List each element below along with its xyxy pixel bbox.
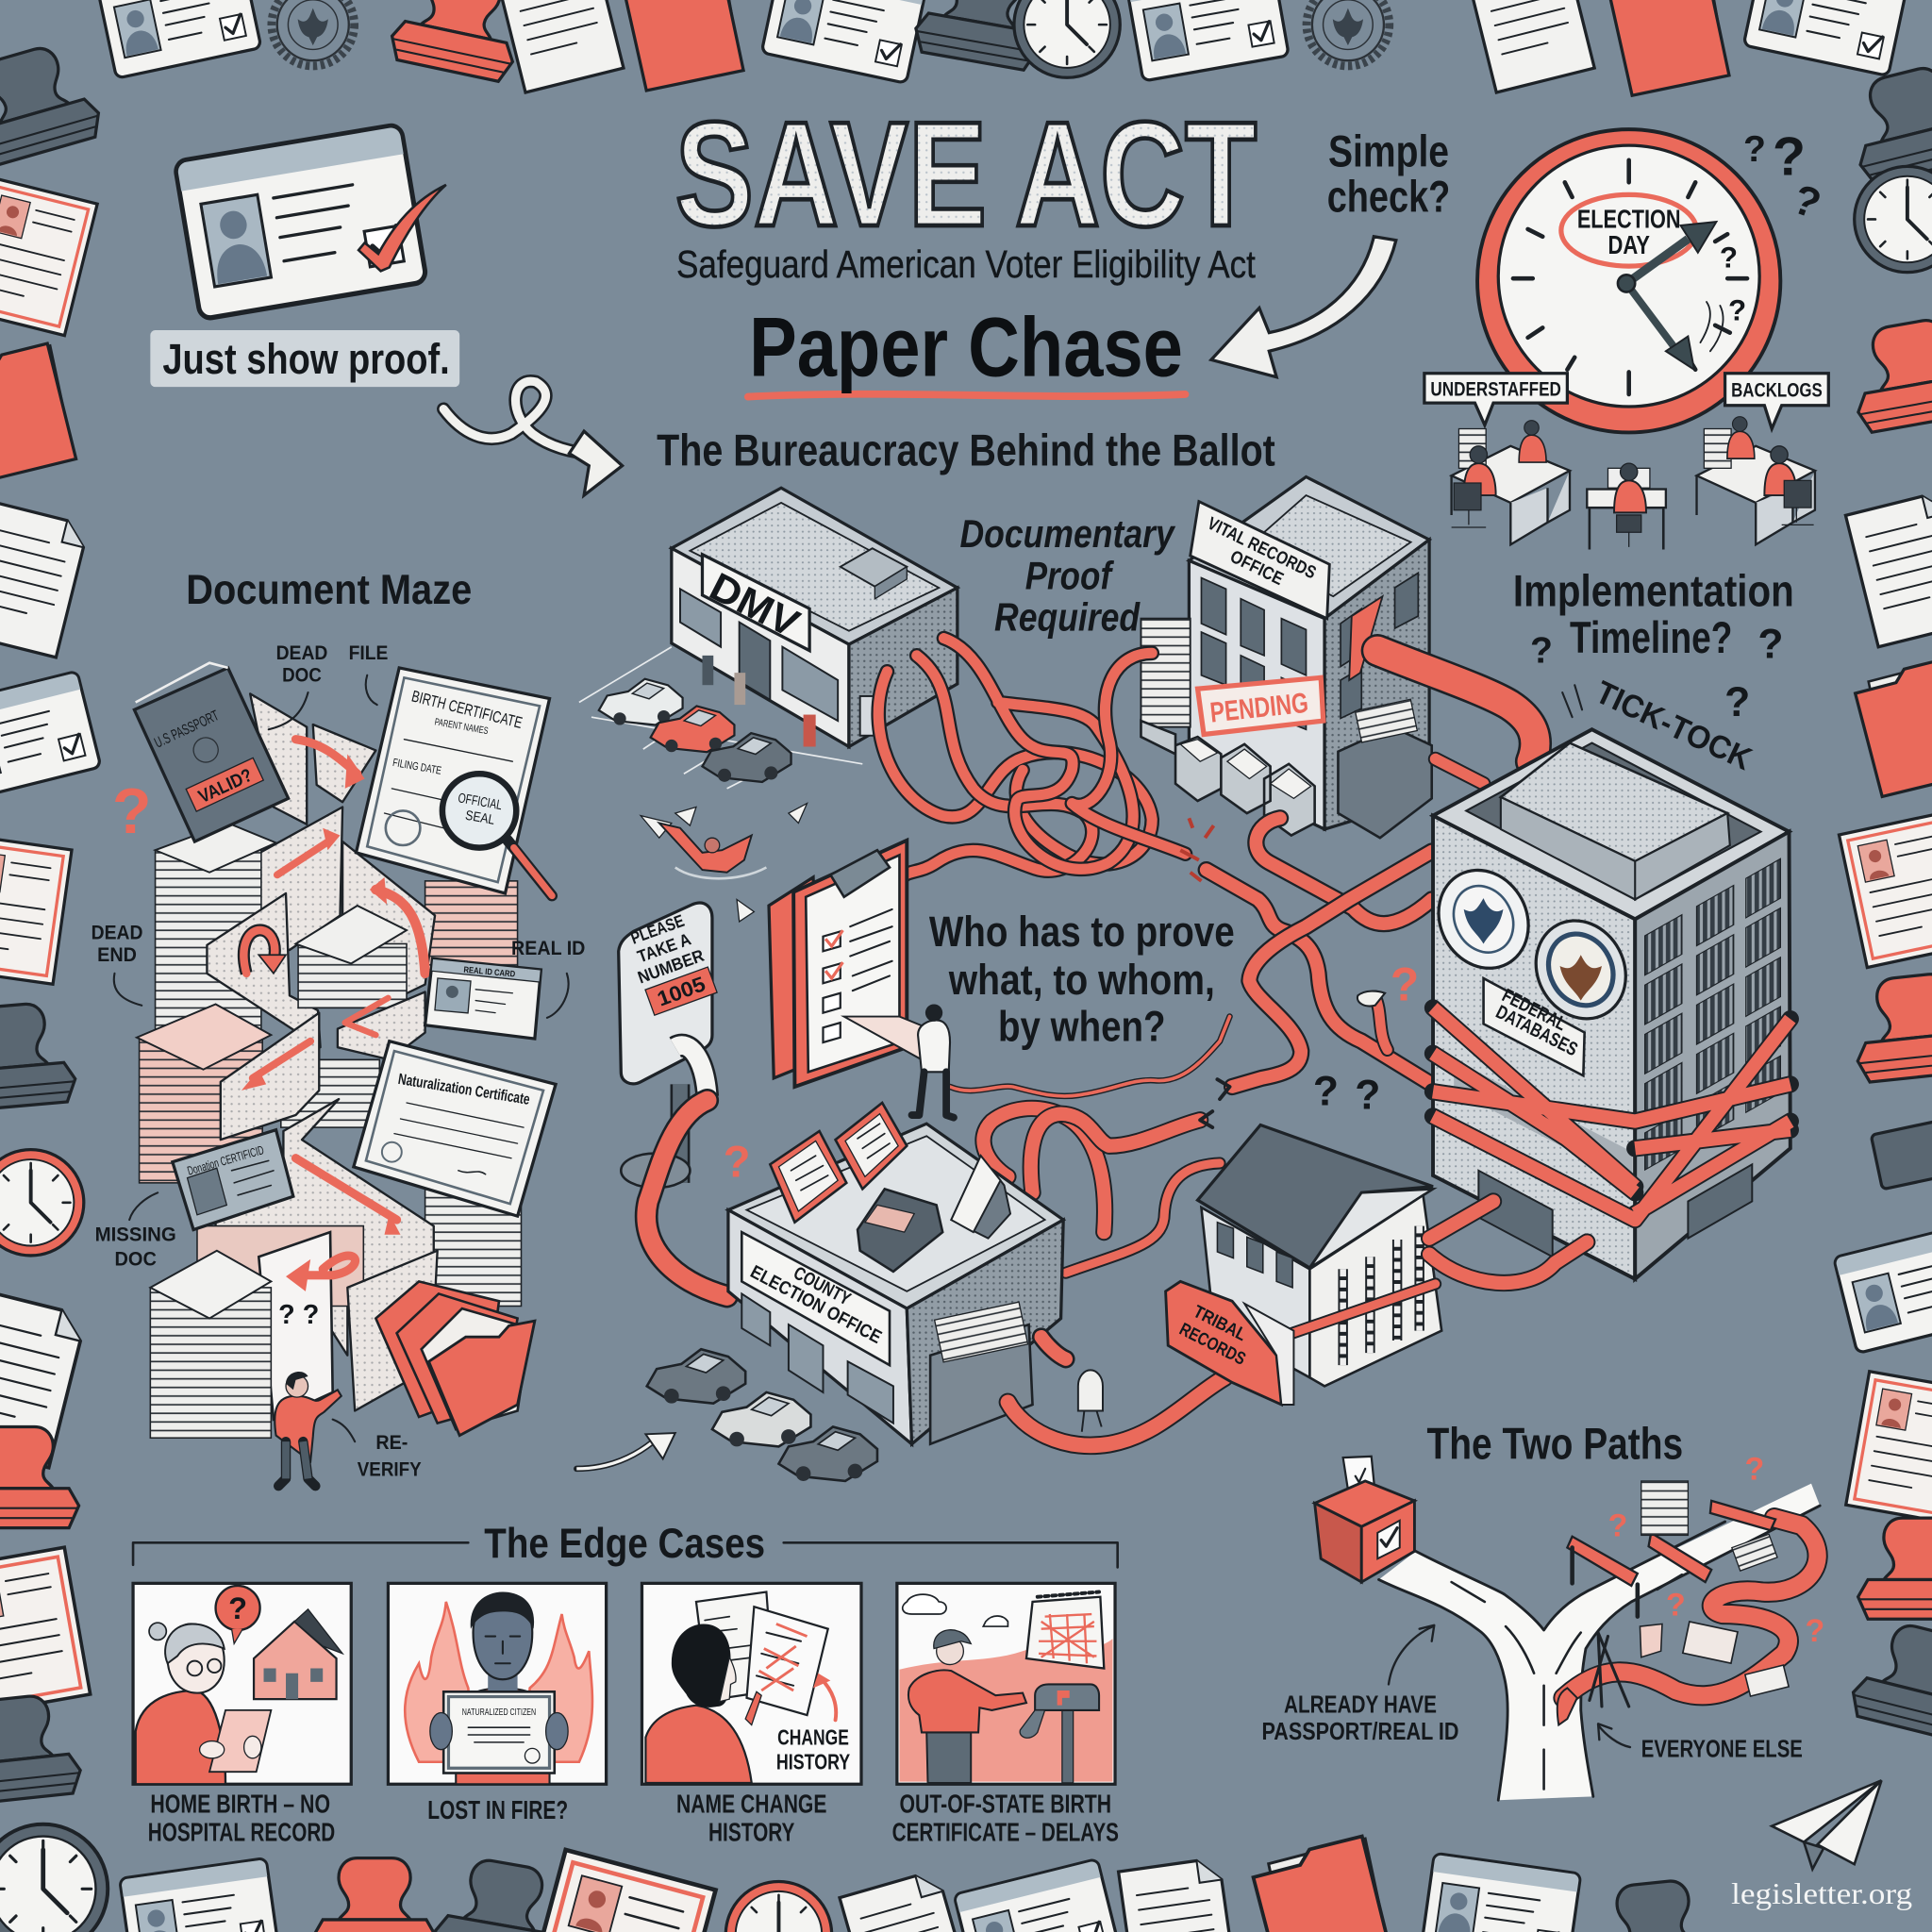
red question marks: ? [1745, 1452, 1764, 1488]
label: question marks near pipes: ? [724, 1136, 750, 1186]
certificate: naturalization [354, 1041, 556, 1216]
building: Tribal Records courthouse: TRIBAL [1190, 1302, 1249, 1345]
arrow: curly to tagline [443, 381, 623, 495]
label: Implementation Timeline: ? [1724, 679, 1750, 725]
building: County Election Office [576, 1103, 1103, 1481]
subtitle: Safeguard American Voter Eligibility Act [676, 242, 1256, 286]
case: lost in fire: NATURALIZED CITIZEN [462, 1707, 536, 1718]
tangled red tape knot [878, 639, 1214, 881]
building: Tribal Records courthouse: RECORDS [1176, 1320, 1249, 1370]
red question marks: ? [1666, 1587, 1686, 1623]
person: confused [275, 1372, 341, 1486]
label: Simple check: Simple [1328, 125, 1449, 175]
desks with overworked staff [1452, 417, 1815, 550]
clock: Election Day: DAY [1607, 230, 1650, 259]
kiosk: please take a number: 1005 [654, 972, 708, 1011]
heading: The Edge Cases: The Edge Cases [484, 1521, 765, 1567]
edge case captions: LOST IN FIRE? [427, 1795, 568, 1824]
icon: passport: VALID? [195, 765, 256, 808]
edge case captions: HISTORY [708, 1817, 794, 1846]
edge case captions: OUT-OF-STATE BIRTH [899, 1789, 1111, 1818]
label: everyone else: EVERYONE ELSE [1641, 1735, 1803, 1763]
label: Backlogs [1725, 374, 1828, 429]
label: Documentary Proof Required: Documentary [959, 511, 1175, 556]
road fork [1379, 1484, 1820, 1800]
red tape wrapped around building [1433, 1008, 1790, 1220]
kiosk: please take a number [619, 903, 727, 1296]
title: SAVE ACT [675, 92, 1257, 258]
red tape path with obstacles [1557, 1481, 1818, 1725]
label: question marks near pipes: ? [1391, 958, 1419, 1011]
border: right column [1834, 58, 1932, 1743]
clock: Election Day: ? [1728, 294, 1746, 327]
heading: The Two Paths: The Two Paths [1426, 1418, 1683, 1468]
label: Documentary Proof Required: Proof [1025, 553, 1115, 597]
label: Implementation Timeline: Timeline? [1570, 612, 1732, 662]
building: Vital Records Office: PENDING [1208, 688, 1310, 729]
label: Documentary Proof Required [959, 511, 1175, 640]
label: question marks near pipes [724, 958, 1419, 1186]
question: who has to prove: Who has to prove [929, 908, 1235, 956]
label: Simple check: check? [1327, 172, 1450, 222]
maze labels: REAL ID [511, 938, 585, 959]
label: Backlogs: BACKLOGS [1731, 380, 1823, 402]
icon: ID card with check [175, 125, 446, 320]
maze arrows [242, 740, 425, 1330]
edge case captions: HOSPITAL RECORD [148, 1817, 335, 1846]
brand: legisletter.org: legisletter.org [1731, 1877, 1912, 1910]
maze labels: VERIFY [358, 1459, 422, 1481]
building: Federal Databases: FEDERAL [1499, 985, 1570, 1035]
heading: Paper Chase: Paper Chase [749, 300, 1183, 393]
question mark red: ? [112, 776, 151, 847]
question marks near clock: ? [1787, 175, 1826, 228]
label: already have passport [1261, 1625, 1458, 1745]
maze labels: DOC [282, 664, 322, 686]
border: top row [96, 0, 1908, 97]
label: Understaffed [1424, 374, 1567, 425]
border: left column [0, 37, 108, 1932]
question marks near clock: ? [1743, 129, 1766, 170]
callout: Just show proof: Just show proof. [162, 335, 450, 383]
icon: red folders [375, 1281, 535, 1436]
broken pipes to federal databases [950, 759, 1484, 1096]
kiosk: please take a number: NUMBER [635, 945, 707, 987]
question marks near clock: ? [1773, 126, 1806, 187]
clock: Election Day: ? [1720, 241, 1738, 274]
maze labels [92, 642, 585, 1481]
question: who has to prove: by when? [998, 1003, 1166, 1051]
label: question marks near pipes: ? [1313, 1069, 1339, 1115]
case: name change: CHANGE [777, 1724, 849, 1749]
certificate: birth certificate with magnifier: SEAL [464, 808, 496, 828]
icon: passport: U.S PASSPORT [152, 708, 222, 752]
building: DMV [579, 488, 958, 789]
label: already have passport: ALREADY HAVE [1284, 1690, 1437, 1719]
case: out of state [897, 1583, 1115, 1784]
arrow: to Paper Chase [1211, 237, 1396, 377]
edge case captions: CERTIFICATE – DELAYS [892, 1817, 1119, 1846]
building: Vital Records Office: VITAL RECORDS [1204, 514, 1319, 583]
pipe: election office to tribal records [1008, 1377, 1224, 1445]
maze labels: RE- [375, 1432, 408, 1454]
certificate: birth certificate with magnifier: OFFICIAL [457, 791, 503, 813]
kiosk: please take a number: TAKE A [635, 929, 693, 966]
maze labels: DEAD [92, 922, 143, 943]
icon: passport [134, 663, 289, 841]
icon: paper plane [1772, 1780, 1881, 1869]
certificate: naturalization: Naturalization Certificate [397, 1071, 531, 1108]
heading bracket [133, 1542, 1118, 1567]
panel: The Edge Cases [133, 1521, 1119, 1846]
question: who has to prove [929, 908, 1235, 1051]
building: County Election Office: COUNTY [790, 1262, 854, 1310]
panel: The Two Paths [1261, 1418, 1824, 1800]
red question marks: ? [1806, 1613, 1824, 1649]
label: Implementation Timeline [1513, 566, 1794, 725]
case: home birth [133, 1583, 351, 1784]
case: lost in fire [388, 1583, 607, 1784]
red question marks: ? [1608, 1508, 1627, 1544]
label: Implementation Timeline: ? [1757, 621, 1783, 667]
maze labels: FILE [349, 642, 388, 664]
heading: Document Maze: Document Maze [186, 567, 472, 613]
maze labels: MISSING [95, 1224, 176, 1245]
building: Vital Records Office: OFFICE [1226, 547, 1287, 590]
label: Simple check [1327, 125, 1450, 222]
clipboard with checklist [769, 841, 954, 1118]
card: certificate ID [173, 1130, 293, 1230]
card: real ID [425, 958, 541, 1039]
card: certificate ID: Donation CERTIFICID [186, 1142, 265, 1178]
case: home birth: ? [228, 1591, 247, 1625]
tagline: The Bureaucracy Behind the Ballot [657, 425, 1275, 475]
case: name change: HISTORY [776, 1750, 850, 1774]
clock: Election Day: ELECTION [1577, 205, 1681, 234]
border: bottom row [120, 1834, 1723, 1932]
maze labels: DEAD [276, 642, 327, 664]
building: Tribal Records courthouse [1166, 1124, 1441, 1405]
certificate: birth certificate with magnifier [356, 668, 552, 896]
maze arrows: ? ? [278, 1300, 319, 1330]
kiosk: please take a number: PLEASE [628, 910, 687, 948]
person drowning in paperwork [641, 804, 808, 922]
label: Implementation Timeline: Implementation [1513, 566, 1794, 616]
case: name change [641, 1583, 861, 1784]
card: real ID: REAL ID CARD [463, 965, 516, 979]
edge case captions [148, 1789, 1119, 1846]
maze labels: DOC [114, 1248, 157, 1270]
maze labels: END [97, 944, 137, 966]
label: Understaffed: UNDERSTAFFED [1430, 378, 1561, 400]
certificate: birth certificate with magnifier: FILING DATE [391, 757, 442, 777]
label: Documentary Proof Required: Required [994, 595, 1141, 640]
label: Implementation Timeline: ? [1530, 631, 1553, 672]
paper stacks and maze walls [137, 693, 521, 1438]
label: everyone else [1598, 1724, 1803, 1763]
icon: ballot box [1315, 1457, 1414, 1582]
label: already have passport: PASSPORT/REAL ID [1261, 1717, 1458, 1745]
building: Vital Records Office [1141, 476, 1432, 838]
label: question marks near pipes: ? [1355, 1073, 1380, 1119]
big pipe: vital records to federal [1377, 651, 1535, 761]
building: Federal Databases [1422, 729, 1790, 1279]
certificate: birth certificate with magnifier: PARENT NAMES [434, 717, 489, 737]
edge case captions: HOME BIRTH – NO [150, 1789, 330, 1818]
hoses from county office [983, 1079, 1230, 1273]
building: Federal Databases: DATABASES [1492, 1002, 1581, 1060]
question: who has to prove: what, to whom, [948, 956, 1215, 1004]
building: DMV: DMV [703, 564, 807, 646]
red question marks [1608, 1452, 1824, 1649]
certificate: birth certificate with magnifier: BIRTH CERTIFICATE [409, 687, 525, 732]
building: County Election Office: ELECTION OFFICE [747, 1261, 885, 1348]
panel: Document Maze [92, 567, 585, 1486]
pipes: federal base [1429, 1201, 1587, 1283]
clock: Election Day [1477, 129, 1780, 432]
question marks near clock [1743, 126, 1826, 228]
edge case captions: NAME CHANGE [676, 1789, 826, 1818]
label: Tick-Tock: TICK-TOCK [1590, 675, 1757, 777]
